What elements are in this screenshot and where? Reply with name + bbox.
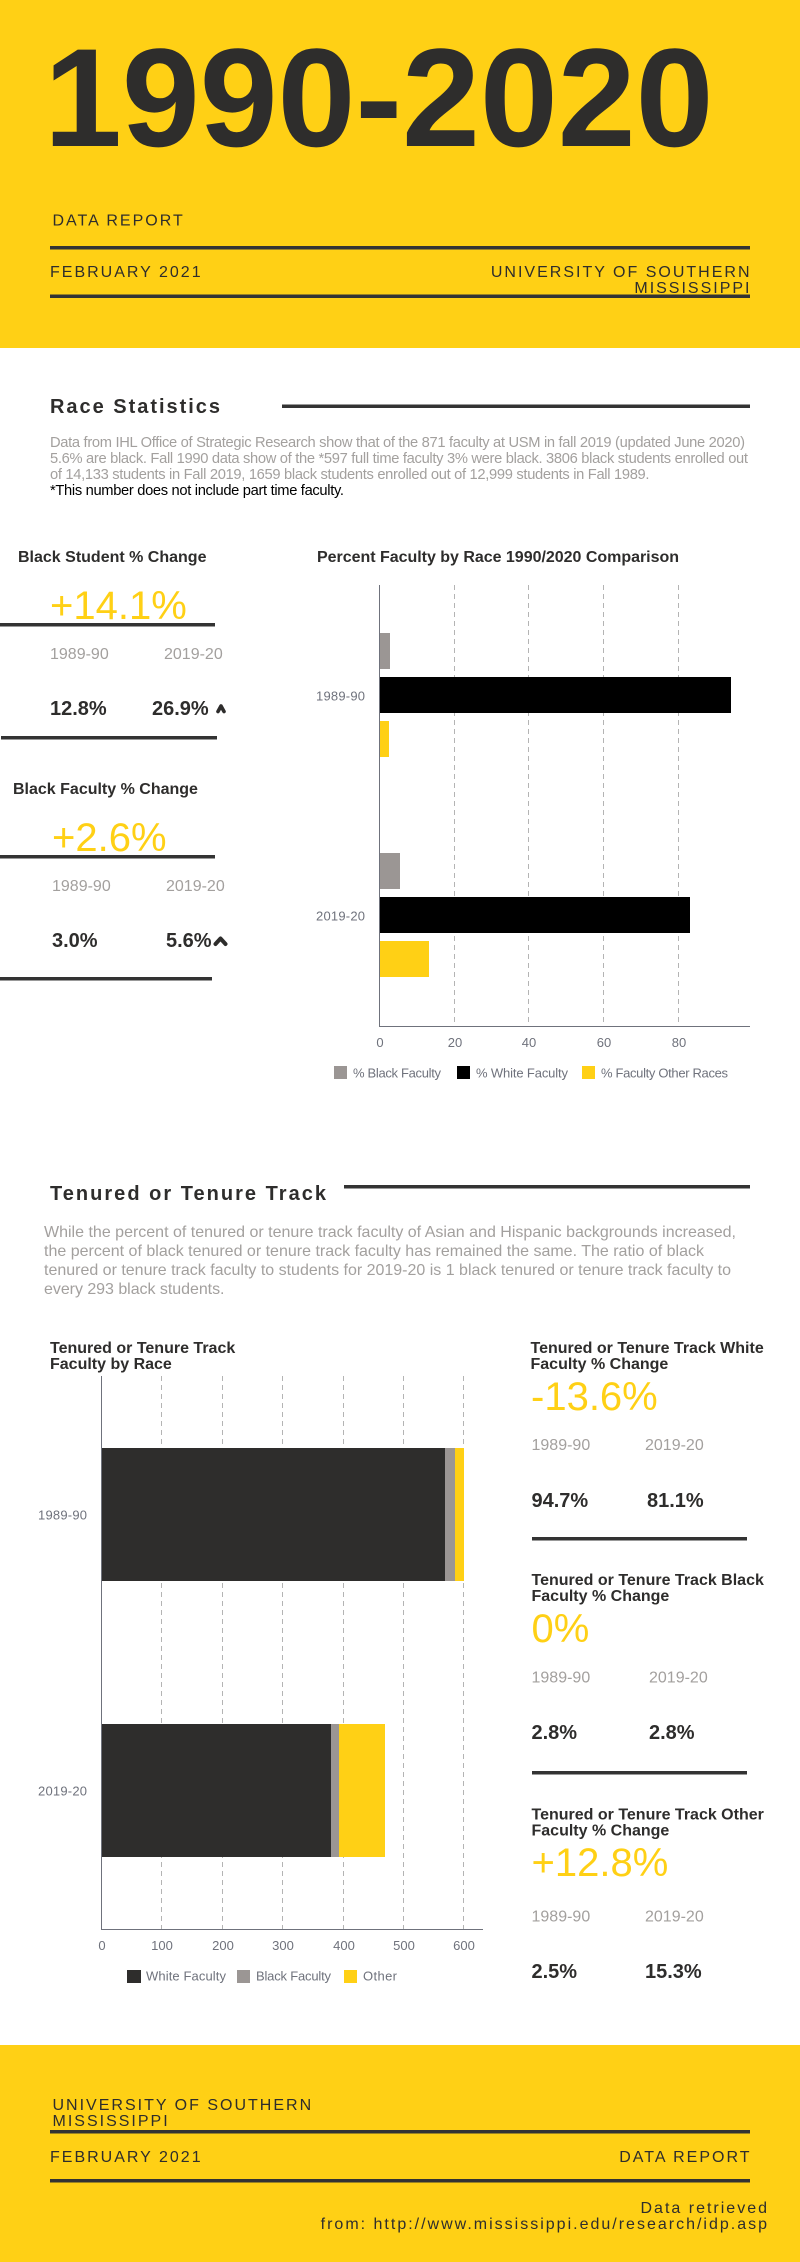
bar chart: percent faculty by race: 80 [672,1035,686,1050]
panel: tenure white faculty change: 81.1% [647,1490,704,1512]
panel: tenure white faculty change: 94.7% [532,1490,588,1512]
panel: black faculty change: 5.6% [166,930,212,952]
panel: black student change: Black Student % Change [18,549,207,566]
bar chart: percent faculty by race: 1989-90 [316,688,365,704]
footer label: data report: DATA REPORT [619,2149,752,2166]
legend: % Black Faculty [353,1066,442,1080]
legend: Other [363,1968,398,1984]
legend [334,1066,728,1080]
footer label: date: FEBRUARY 2021 [50,2149,203,2166]
panel: tenure white faculty change: Faculty % Change [530,1356,668,1373]
header label: university: UNIVERSITY OF SOUTHERN [491,264,752,281]
heading: tenure chart: Tenured or Tenure Track [50,1340,235,1357]
icon: up chevron [218,706,224,712]
text block: race statistics description: of 14,133 students in Fall 2019, 1659 black students enrolled out of 12,999 students in Fall 1989. [50,467,650,483]
legend: White Faculty [146,1968,226,1984]
heading: tenure chart: Faculty by Race [50,1356,172,1373]
panel: tenure other faculty change: Tenured or Tenure Track Other [532,1806,764,1824]
panel: black student change: 12.8% [50,698,107,720]
panel: tenure black faculty change [532,1572,764,1774]
bar chart: tenured faculty by race: 500 [393,1938,415,1953]
panel: tenure other faculty change: 1989-90 [532,1908,590,1926]
bar chart: percent faculty by race: 40 [522,1035,536,1050]
panel: tenure white faculty change: Tenured or Tenure Track White [530,1340,764,1357]
bar chart: tenured faculty by race: 100 [151,1938,173,1953]
header label: data report: DATA REPORT [52,212,185,230]
text block: race statistics description: *This number does not include part time faculty. [50,483,344,499]
panel: black student change: 26.9% [152,698,209,720]
panel: black faculty change [0,781,226,980]
bar chart: percent faculty by race: 0 [376,1035,384,1050]
footer source text: Data retrieved [640,2200,769,2217]
bar chart: tenured faculty by race: 0 [98,1938,106,1953]
panel: black faculty change: 1989-90 [52,878,111,895]
panel: black student change: 1989-90 [50,646,109,663]
bar chart: tenured faculty by race: 400 [333,1938,355,1953]
stat: white faculty change value: -13.6% [531,1375,658,1419]
legend: % White Faculty [476,1066,568,1080]
legend: Black Faculty [256,1968,332,1984]
panel: black faculty change: 2019-20 [166,878,225,895]
bar chart: percent faculty by race: 20 [448,1035,462,1050]
panel: tenure other faculty change: Faculty % Change [532,1822,669,1840]
panel: tenure other faculty change [532,1806,764,1983]
text block: tenure description: While the percent of tenured or tenure track faculty of Asian and Hispanic backgrounds increased, [44,1224,736,1241]
title: 1990-2020 [44,19,714,176]
header label: date: FEBRUARY 2021 [50,264,203,281]
bar chart: percent faculty by race: 60 [597,1035,611,1050]
bar chart: tenured faculty by race: 300 [272,1938,294,1953]
heading: race statistics: Race Statistics [50,396,220,418]
bar chart: tenured faculty by race [38,1376,483,1984]
heading: percent faculty chart: Percent Faculty by Race 1990/2020 Comparison [317,549,679,566]
bar chart: percent faculty by race: 2019-20 [316,908,365,924]
bar chart: tenured faculty by race: 1989-90 [38,1508,87,1522]
panel: tenure white faculty change [530,1340,764,1540]
footer source text: from: http://www.mississippi.edu/research/idp.asp [321,2216,769,2233]
panel: tenure black faculty change: 2.8% [532,1722,577,1744]
legend: % Faculty Other Races [601,1066,728,1080]
panel: tenure black faculty change: 1989-90 [532,1670,590,1686]
footer label: university: UNIVERSITY OF SOUTHERN [52,2097,313,2114]
footer label: university: MISSISSIPPI [52,2113,170,2130]
icon: up chevron [216,938,226,944]
panel: tenure other faculty change: 2019-20 [645,1908,704,1926]
text block: tenure description: the percent of black tenured or tenure track faculty has remained the same. The ratio of black [44,1243,705,1260]
text block: race statistics description: 5.6% are black. Fall 1990 data show of the *597 full time faculty 3% were black. 3806 black students enrolled out [50,451,748,467]
legend [127,1968,398,1984]
bar chart: tenured faculty by race: 600 [453,1938,475,1953]
bar chart: percent faculty by race [316,585,750,1080]
text block: race statistics description: Data from IHL Office of Strategic Research show that of the 871 faculty at USM in fall 2019 (updated June 2020) [50,435,745,451]
panel: black student change: 2019-20 [164,646,223,663]
panel: tenure white faculty change: 1989-90 [532,1437,590,1454]
panel: footer banner [0,2045,800,2262]
panel: tenure other faculty change: 15.3% [645,1961,702,1983]
panel: header banner [0,0,800,348]
panel: tenure black faculty change: Tenured or Tenure Track Black [532,1572,764,1589]
panel: tenure other faculty change: 2.5% [532,1961,577,1983]
panel: tenure white faculty change: 2019-20 [645,1437,704,1454]
header label: university: MISSISSIPPI [634,280,752,297]
stat: student change value: +14.1% [50,584,187,628]
bar chart: tenured faculty by race: 2019-20 [38,1784,87,1798]
panel: black faculty change: 3.0% [52,930,98,952]
stat: black faculty change value: 0% [532,1607,589,1651]
panel: tenure black faculty change: 2.8% [649,1722,695,1744]
text block: tenure description: tenured or tenure track faculty to students for 2019-20 is 1 black tenured or tenure track faculty to [44,1262,731,1279]
stat: faculty change value: +2.6% [52,816,167,860]
panel: tenure black faculty change: Faculty % Change [532,1588,669,1605]
heading: tenured or tenure track: Tenured or Tenure Track [50,1183,327,1205]
panel: black student change [0,549,224,740]
text block: tenure description: every 293 black students. [44,1281,224,1298]
bar chart: tenured faculty by race: 200 [212,1938,234,1953]
panel: tenure black faculty change: 2019-20 [649,1670,708,1686]
stat: other faculty change value: +12.8% [532,1841,668,1885]
panel: black faculty change: Black Faculty % Change [13,781,198,798]
